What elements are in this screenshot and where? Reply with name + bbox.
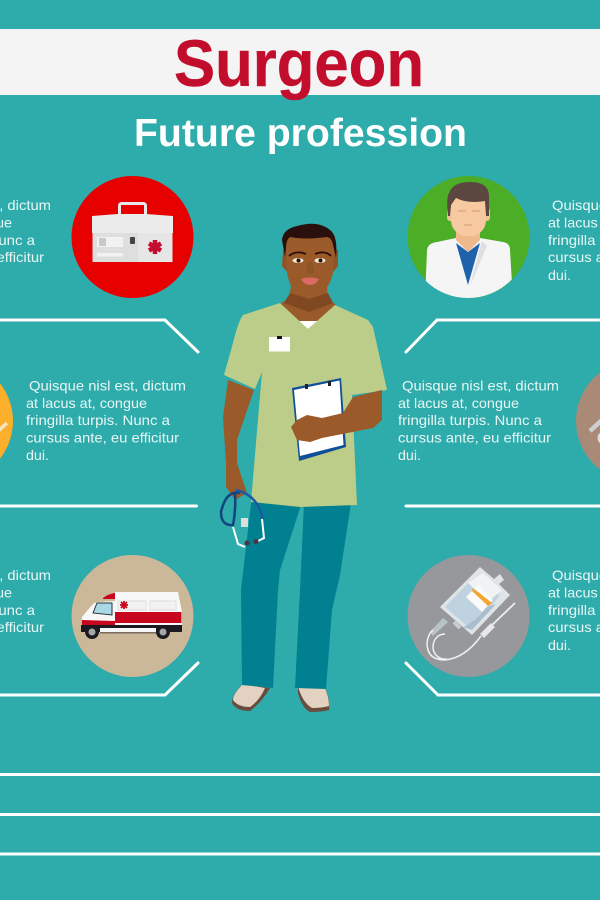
text block: top left	[0, 197, 51, 265]
undershirt	[298, 321, 318, 329]
icon: brown circle	[576, 372, 600, 470]
stethoscope	[221, 490, 264, 547]
surgeon figure	[221, 224, 387, 712]
head	[285, 236, 335, 296]
neck	[280, 280, 336, 331]
text block: middle right: fringilla turpis. Nunc a	[398, 412, 542, 428]
scrub shirt	[224, 303, 387, 507]
text block: middle right	[398, 378, 559, 463]
left arm	[223, 380, 254, 500]
face features	[289, 252, 331, 285]
title banner	[0, 29, 600, 95]
subtitle: Future profession	[134, 112, 467, 155]
text block: middle left: Quisque nisl est, dictum	[29, 378, 186, 394]
icon: first aid kit	[72, 176, 194, 298]
icon: doctor portrait	[408, 176, 530, 300]
title: Surgeon	[174, 26, 424, 100]
text block: middle left: fringilla turpis. Nunc a	[26, 412, 170, 428]
text block: middle left: at lacus at, congue	[26, 395, 147, 411]
text block: bottom right: dui.	[548, 637, 571, 653]
clipboard	[292, 378, 346, 461]
ears	[282, 250, 338, 272]
text block: bottom right	[548, 567, 600, 653]
name badge	[269, 336, 290, 352]
forearm over clipboard	[291, 390, 382, 442]
hair	[282, 224, 336, 257]
text block: bottom left	[0, 567, 51, 635]
text block: middle right: dui.	[398, 447, 421, 463]
trousers	[241, 495, 351, 689]
text block: top right	[548, 197, 600, 283]
text block: middle right: at lacus at, congue	[398, 395, 519, 411]
icon: IV drip bag	[408, 555, 530, 677]
text block: middle left: dui.	[26, 447, 49, 463]
text block: middle right: Quisque nisl est, dictum	[402, 378, 559, 394]
icon: orange circle	[0, 384, 13, 459]
text block: top right: dui.	[548, 267, 571, 283]
text block: middle left: cursus ante, eu efficitur	[26, 430, 179, 446]
text block: middle right: cursus ante, eu efficitur	[398, 430, 551, 446]
icon: ambulance	[72, 555, 194, 677]
text block: middle left	[26, 378, 186, 463]
right shoe	[298, 686, 329, 712]
left shoe	[232, 684, 270, 711]
